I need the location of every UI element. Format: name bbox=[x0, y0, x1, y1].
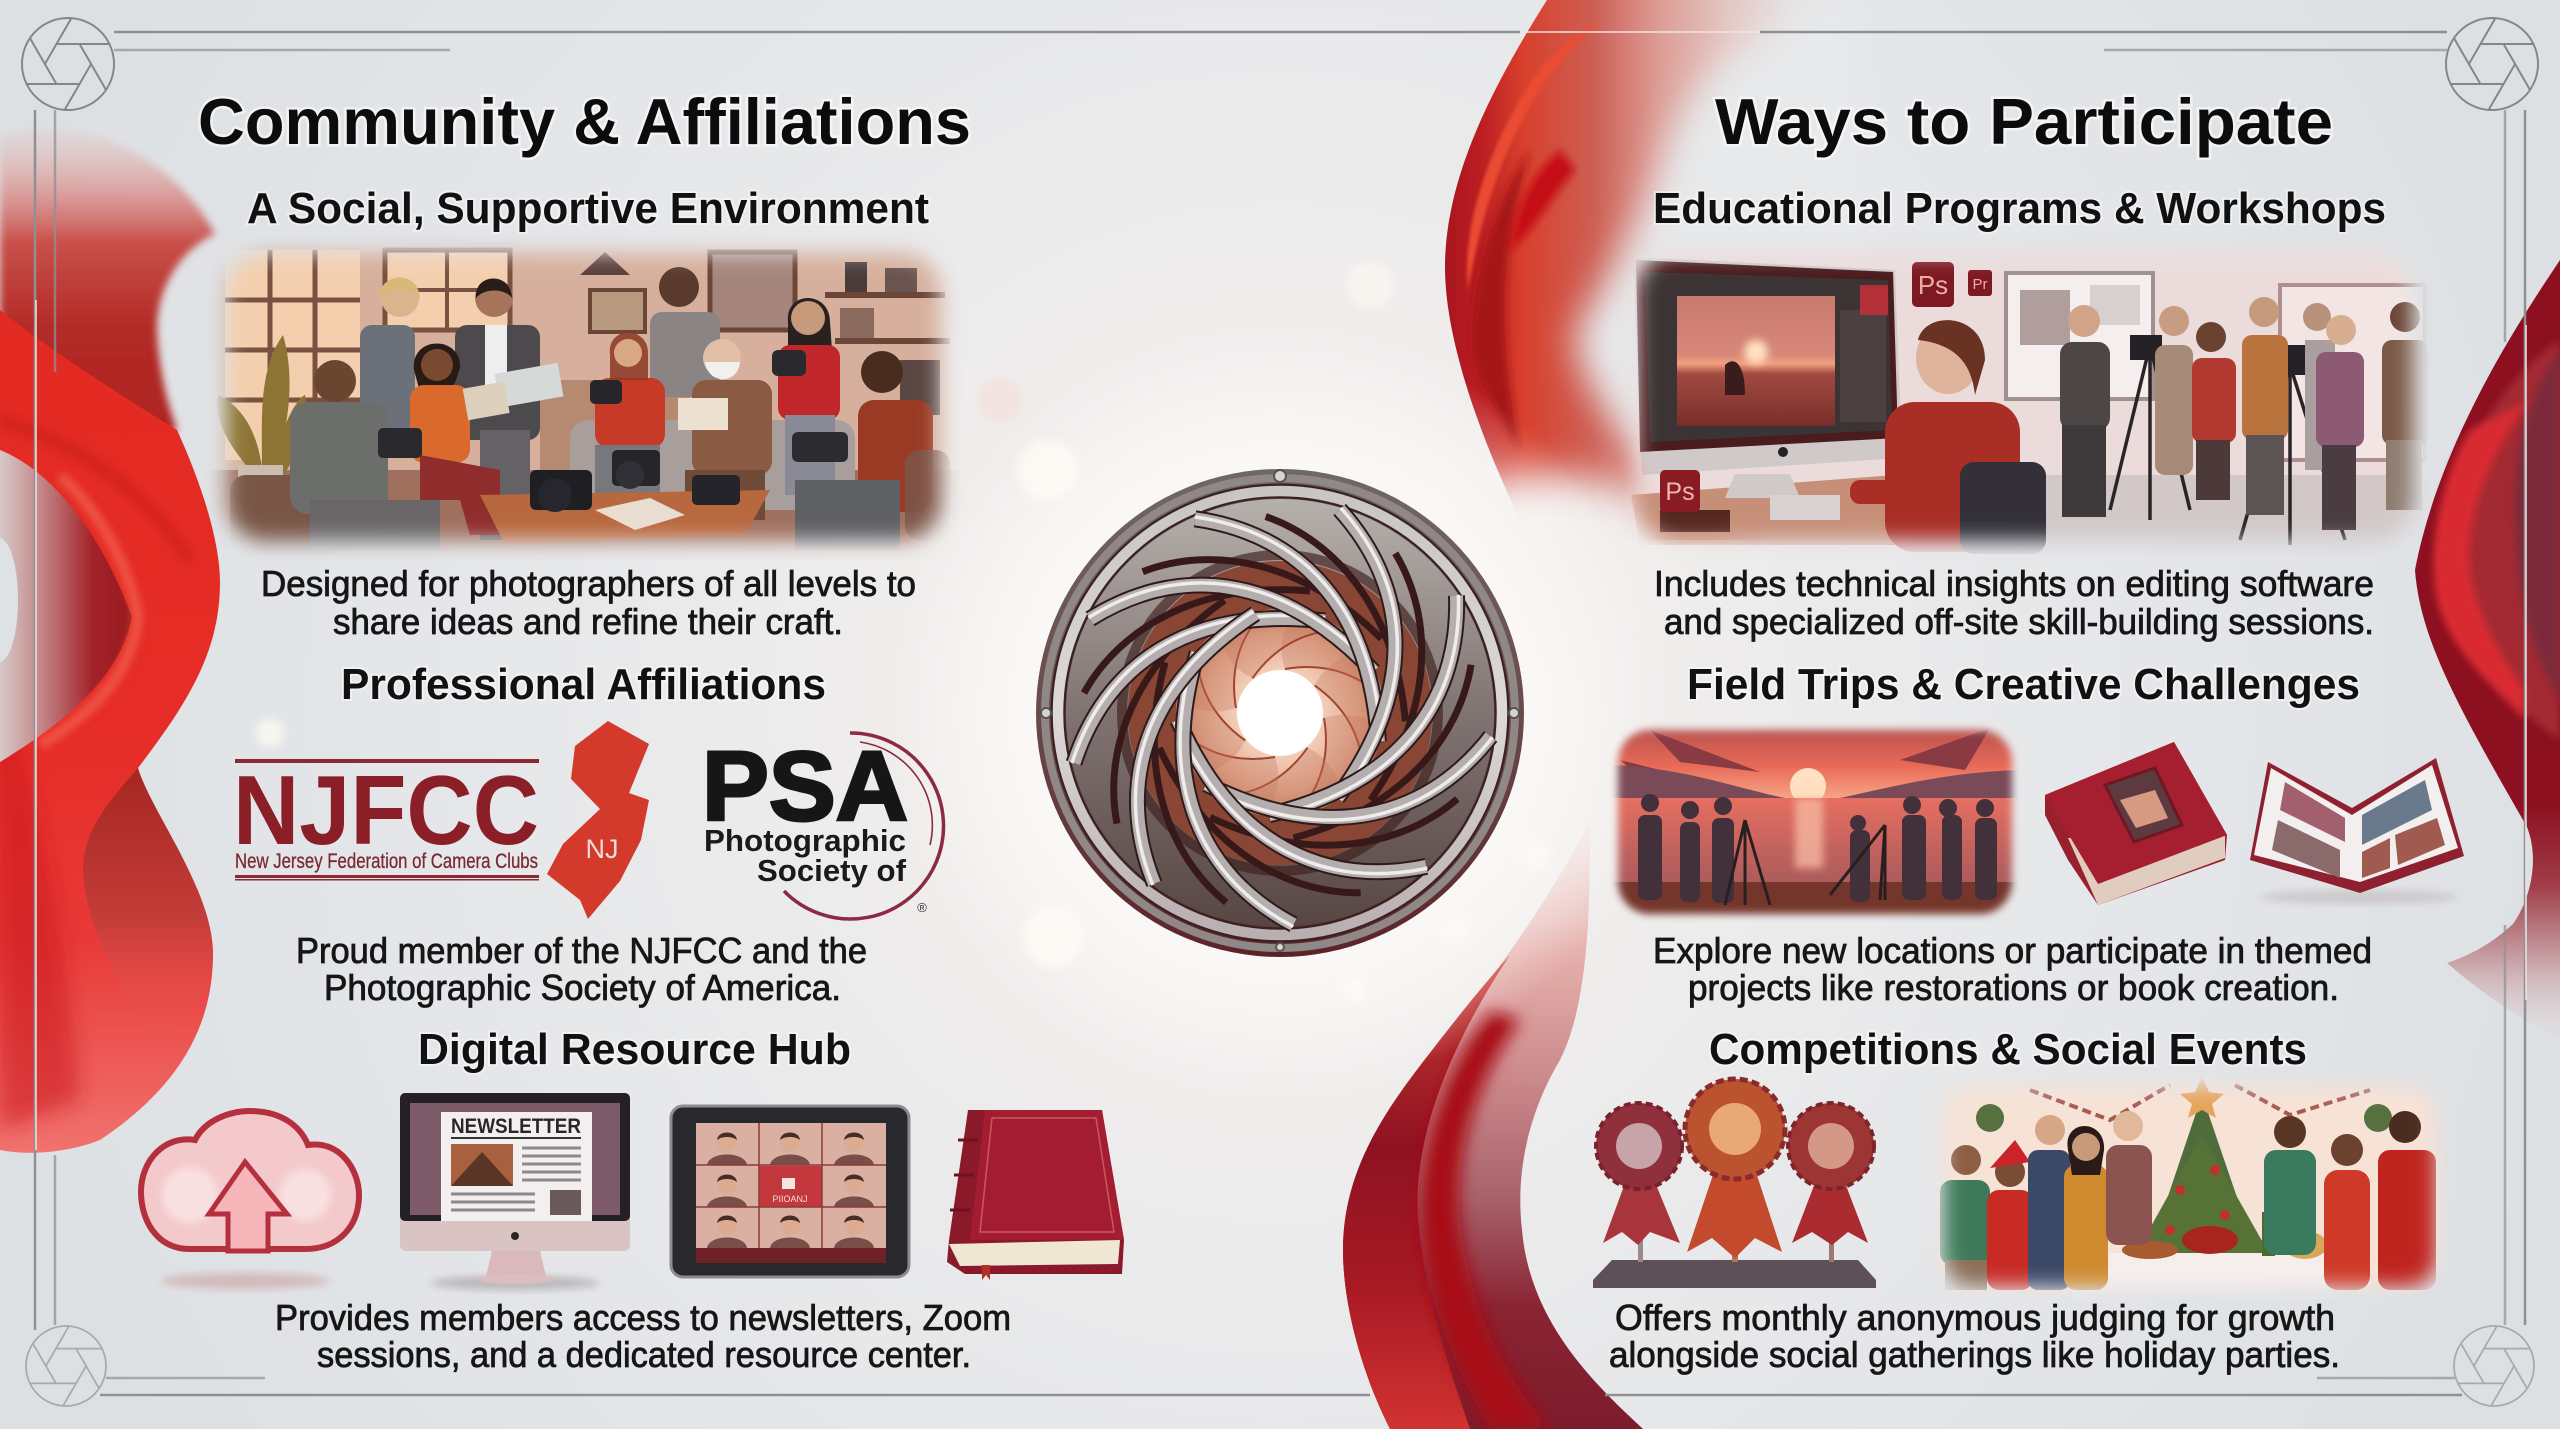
illustration: holiday party bbox=[1920, 1065, 2460, 1303]
illustration: photographers in living room bbox=[200, 230, 970, 560]
logo: NJFCC: New Jersey Federation of Camera Clubs bbox=[235, 850, 538, 873]
description: competitions: alongside social gatherings like holiday parties. bbox=[1609, 1334, 2340, 1375]
illustration: photo editing and workshop: Ps bbox=[1918, 270, 1948, 300]
woman orange bbox=[414, 344, 460, 386]
illustration: photo editing and workshop: Ps bbox=[1665, 478, 1695, 506]
icon: cloud upload bbox=[141, 1111, 359, 1289]
presenter bbox=[2060, 342, 2110, 430]
description: digital hub: Provides members access to newsletters, Zoom bbox=[275, 1297, 1011, 1338]
title: ways to participate: Ways to Participate bbox=[1715, 85, 2333, 158]
logo: NJFCC bbox=[233, 721, 649, 919]
icon: corner aperture top left bbox=[22, 18, 114, 110]
logo: PSA: ® bbox=[917, 900, 927, 915]
logo: PSA: Society of bbox=[757, 853, 907, 888]
icon: tablet with video call bbox=[671, 1106, 909, 1277]
description: environment: share ideas and refine their craft. bbox=[333, 601, 843, 642]
bokeh lights bbox=[256, 261, 1551, 1002]
right man bbox=[858, 400, 933, 512]
panel: ways to participate bbox=[1593, 85, 2464, 1375]
description: digital hub bbox=[275, 1297, 1011, 1375]
description: competitions: Offers monthly anonymous judging for growth bbox=[1615, 1297, 2335, 1338]
description: educational programs bbox=[1654, 563, 2374, 642]
tripods bbox=[2110, 345, 2345, 545]
blonde woman bbox=[360, 325, 415, 430]
description: competitions bbox=[1609, 1297, 2340, 1375]
desk bbox=[1631, 476, 1896, 545]
standing man bbox=[650, 312, 720, 397]
party guests bbox=[1940, 1180, 1990, 1265]
icon: award rosettes on stand bbox=[1593, 1079, 1876, 1288]
logo: PSA bbox=[702, 731, 944, 919]
glow behind central aperture bbox=[900, 333, 1660, 1093]
description: environment bbox=[261, 563, 916, 642]
left red ribbon bbox=[0, 128, 220, 1153]
icon: open photo book bbox=[2250, 758, 2464, 904]
plant bbox=[217, 335, 306, 478]
icon: corner aperture bottom right bbox=[2454, 1326, 2534, 1406]
icon: monitor newsletter bbox=[400, 1093, 630, 1290]
heading: digital resource hub: Digital Resource Hub bbox=[418, 1025, 851, 1074]
description: field trips: projects like restorations or book creation. bbox=[1688, 967, 2339, 1008]
whiteboard bbox=[2006, 273, 2153, 399]
monitor bbox=[1633, 257, 1902, 475]
icon: red book bbox=[947, 1110, 1124, 1280]
right red ribbon bbox=[2415, 260, 2560, 1040]
description: affiliations: Photographic Society of America. bbox=[324, 967, 841, 1008]
group bbox=[2305, 340, 2335, 470]
icon: corner aperture bottom left bbox=[26, 1326, 106, 1406]
icon: tablet with video call: PIIOANJ bbox=[772, 1194, 808, 1204]
icon: red photo book bbox=[2045, 742, 2227, 905]
PS badges bbox=[1912, 262, 1954, 307]
logo: PSA: Photographic bbox=[704, 823, 906, 858]
description: field trips bbox=[1653, 930, 2372, 1008]
heading: social supportive environment: A Social, Supportive Environment bbox=[247, 184, 929, 233]
illustration: sunset field trip bbox=[1600, 715, 2030, 930]
icon: monitor newsletter: NEWSLETTER bbox=[451, 1115, 581, 1138]
icon: corner aperture top right bbox=[2446, 18, 2538, 110]
logo: NJFCC: NJFCC bbox=[233, 755, 539, 865]
panel: community and affiliations bbox=[141, 85, 1124, 1375]
description: field trips: Explore new locations or participate in themed bbox=[1653, 930, 2372, 971]
description: affiliations bbox=[296, 930, 867, 1008]
title: community and affiliations: Community & Affiliations bbox=[198, 85, 971, 158]
heading: field trips: Field Trips & Creative Challenges bbox=[1687, 660, 2360, 709]
central red ribbon bottom bbox=[1343, 820, 1643, 1429]
heading: educational programs: Educational Programs & Workshops bbox=[1653, 184, 2386, 233]
description: educational programs: Includes technical insights on editing software bbox=[1654, 563, 2374, 604]
illustration: photo editing and workshop: Pr bbox=[1972, 276, 1988, 293]
central red ribbon top bbox=[1425, 0, 1860, 655]
sofa bbox=[570, 420, 855, 510]
coffee table and cameras bbox=[480, 490, 770, 545]
central camera aperture bbox=[1036, 469, 1524, 957]
heading: competitions: Competitions & Social Events bbox=[1709, 1025, 2307, 1074]
woman in red standing bbox=[788, 298, 832, 350]
old man bbox=[692, 380, 772, 475]
heading: professional affiliations: Professional Affiliations bbox=[341, 660, 826, 709]
bearded man bbox=[455, 325, 540, 440]
description: educational programs: and specialized off-site skill-building sessions. bbox=[1664, 601, 2374, 642]
description: affiliations: Proud member of the NJFCC and the bbox=[296, 930, 867, 971]
armchair and seated man bbox=[230, 475, 310, 549]
logo: NJFCC: NJ bbox=[586, 834, 618, 864]
description: environment: Designed for photographers of all levels to bbox=[261, 563, 916, 604]
description: digital hub: sessions, and a dedicated resource center. bbox=[317, 1334, 971, 1375]
man at computer bbox=[1885, 402, 2020, 552]
logo: PSA: PSA bbox=[702, 731, 908, 841]
illustration: photo editing and workshop bbox=[1625, 254, 2428, 554]
table with food bbox=[2072, 1253, 2332, 1303]
woman seated red bbox=[595, 378, 665, 448]
